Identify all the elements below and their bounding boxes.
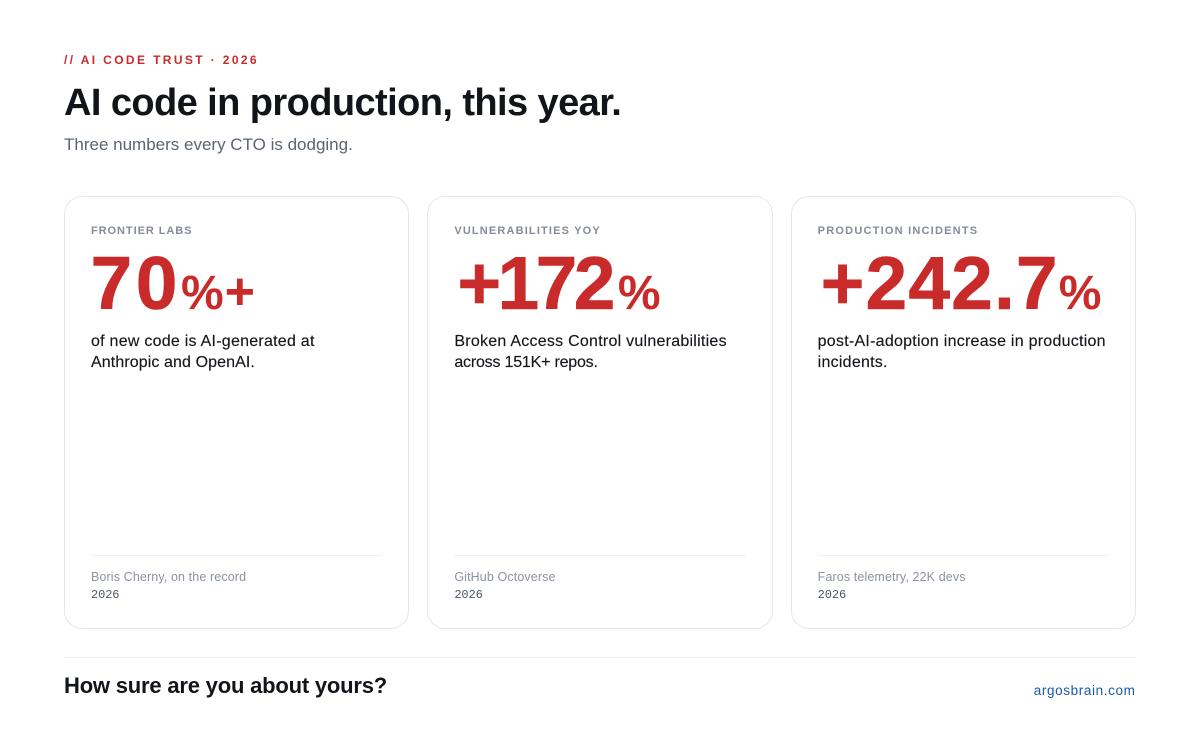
description (91, 333, 315, 371)
year: 2026 (91, 588, 119, 602)
eyebrow: // AI CODE TRUST · 2026 (64, 53, 259, 67)
subtitle: Three numbers every CTO is dodging. (64, 135, 353, 154)
big number: +242.7%: +242.7% (821, 241, 1101, 325)
description: across 151K+ repos. (454, 354, 598, 371)
card label: FRONTIER LABS (91, 225, 192, 237)
description (818, 333, 1106, 371)
panel: production incidents (791, 196, 1136, 629)
big number: 70%+: 70%+ (90, 241, 255, 325)
big number: +172%: +172% (457, 241, 661, 325)
description: post-AI-adoption increase in production (818, 333, 1106, 350)
site link: argosbrain.com (1034, 683, 1136, 698)
card label: PRODUCTION INCIDENTS (818, 225, 978, 237)
closing question: How sure are you about yours? (64, 673, 387, 698)
source: Boris Cherny, on the record (91, 570, 246, 584)
year: 2026 (818, 588, 846, 602)
description: incidents. (818, 354, 888, 371)
source: GitHub Octoverse (454, 570, 556, 584)
description: of new code is AI-generated at (91, 333, 315, 350)
source: Faros telemetry, 22K devs (818, 570, 966, 584)
card label: VULNERABILITIES YOY (454, 225, 601, 237)
year: 2026 (454, 588, 483, 602)
description (454, 333, 727, 371)
description: Broken Access Control vulnerabilities (454, 333, 727, 350)
description: Anthropic and OpenAI. (91, 354, 255, 371)
panel: vulnerabilities yoy (427, 196, 773, 629)
panel: frontier labs (64, 196, 409, 629)
title: AI code in production, this year. (64, 82, 621, 124)
